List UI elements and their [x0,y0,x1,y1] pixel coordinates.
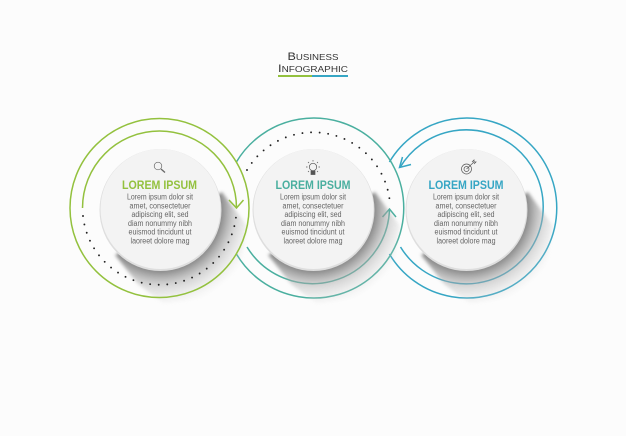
text block teal: diam nonummy nibh [281,219,345,228]
inner arrow green [82,131,244,208]
text block teal: euismod tincidunt ut [282,228,345,237]
text block green: diam nonummy nibh [128,219,192,228]
drop shadow teal [268,192,400,304]
drop shadow green [115,192,247,304]
dotted arc green [83,216,236,285]
drop shadow blue [421,192,553,304]
text block blue: diam nonummy nibh [434,219,498,228]
disc teal [252,149,374,271]
text block blue [433,192,500,246]
title [278,51,348,77]
dotted arc teal [247,132,390,199]
text block green [127,192,194,246]
inner arrow blue [400,130,543,284]
text block teal [280,192,347,246]
panel: step 3 blue [389,118,557,304]
icon: light bulb [306,160,320,174]
icon: target [462,160,476,174]
text block teal: laoreet dolore mag [284,236,342,246]
heading blue: LOREM IPSUM [428,180,504,192]
heading green: LOREM IPSUM [122,180,197,192]
icon: magnifier [154,162,165,172]
text block green: Lorem ipsum dolor sit [127,192,194,202]
title: BUSINESS [288,51,339,63]
text block blue: Lorem ipsum dolor sit [433,192,500,202]
inner arrow teal [247,209,396,284]
text block blue: adipiscing elit, sed [438,210,494,219]
title: INFOGRAPHIC [278,63,348,75]
text block teal: amet, consectetuer [282,201,344,210]
heading teal: LOREM IPSUM [276,180,350,192]
text block green: euismod tincidunt ut [128,228,192,237]
disc green [100,149,222,271]
text block teal: adipiscing elit, sed [284,210,342,219]
text block teal: Lorem ipsum dolor sit [280,192,347,202]
text block blue: euismod tincidunt ut [434,228,498,237]
outer ring green [70,118,249,298]
text block green: adipiscing elit, sed [132,210,188,219]
text block green: amet, consectetuer [130,201,191,210]
panel: step 2 teal [236,118,404,304]
text block green: laoreet dolore mag [130,236,190,246]
panel: step 1 green [70,118,249,304]
text block blue: laoreet dolore mag [436,236,496,246]
disc blue [406,149,528,271]
outer ring blue [389,118,557,298]
outer ring teal [236,118,404,298]
text block blue: amet, consectetuer [436,201,497,210]
